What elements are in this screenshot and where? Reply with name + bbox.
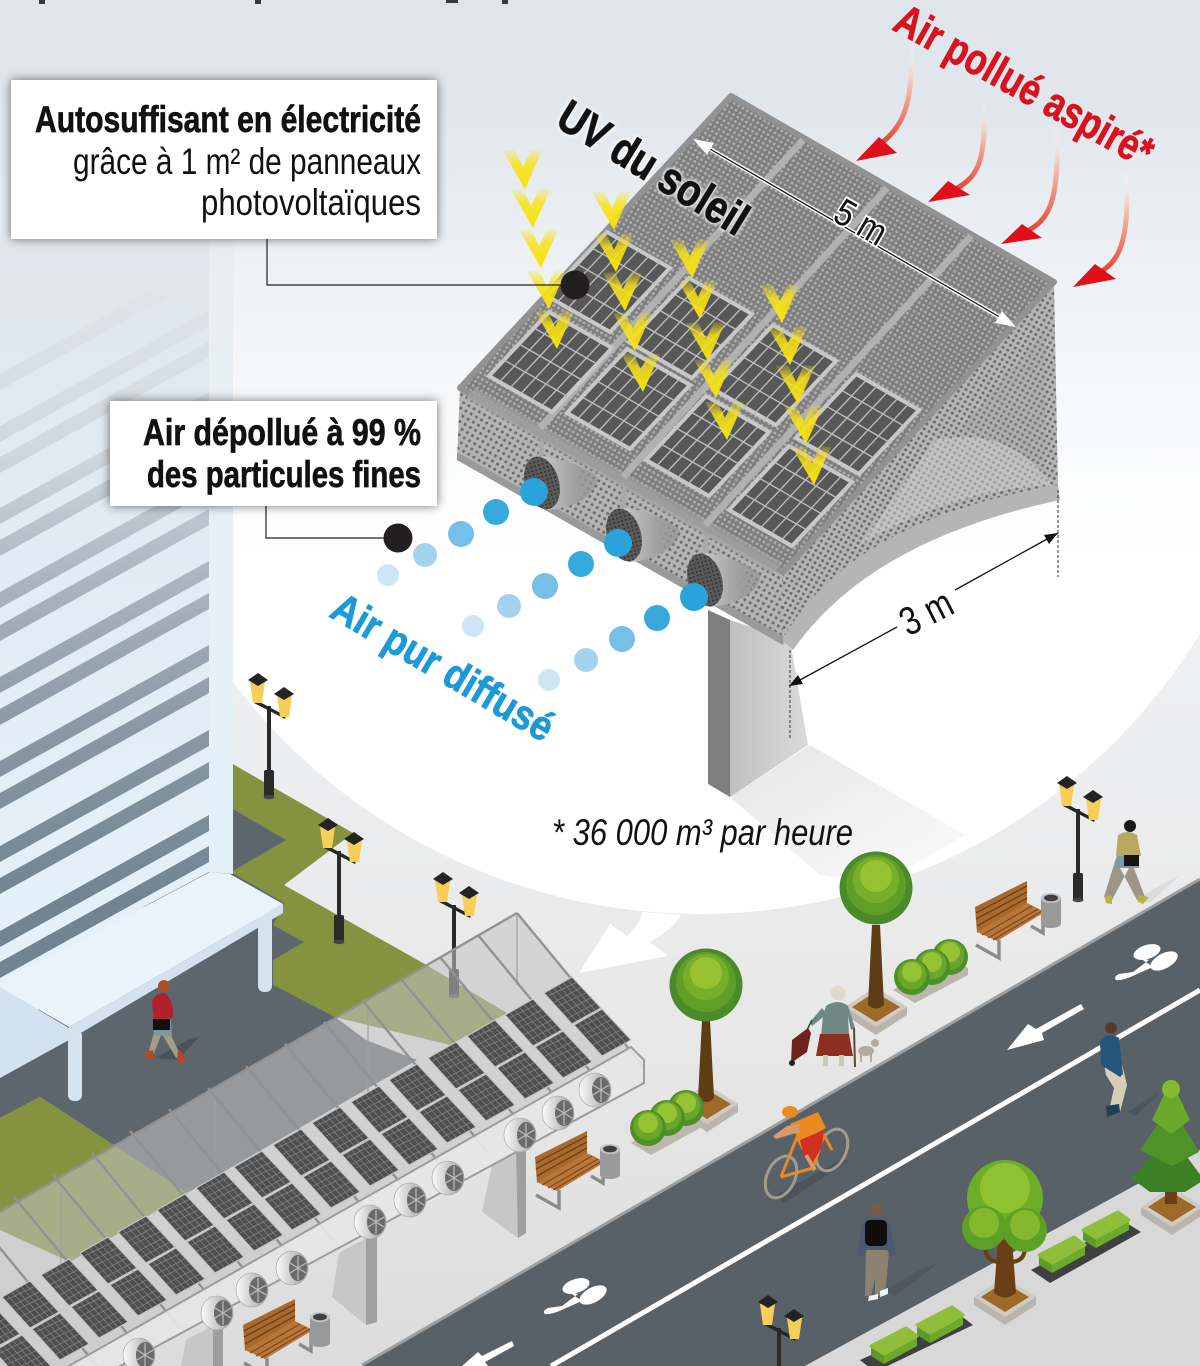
arch rim: [782, 485, 1060, 650]
top clipped text fragments: [39, 0, 508, 4]
glass roof bars: [0, 913, 644, 1366]
fans: [123, 1073, 611, 1366]
callout text: Autosuffisant en électricité: [35, 99, 421, 140]
photovoltaic panels: [489, 232, 919, 546]
dimension: 3 m: [789, 490, 1058, 740]
callout text: des particules fines: [147, 454, 421, 495]
clean air dots: [377, 478, 708, 691]
glass roof: [0, 913, 644, 1366]
clustered tree: [962, 1160, 1047, 1325]
connector line: [266, 506, 388, 538]
lower strip: [466, 388, 783, 574]
facade stripes: [0, 258, 209, 978]
elderly woman with suitcase and dog: [789, 986, 879, 1067]
lawn strips: [0, 763, 507, 1262]
callout: electricity: [11, 80, 590, 300]
callout text: Air dépollué à 99 %: [143, 412, 421, 453]
fan housing: [0, 1047, 644, 1366]
benches and bins: [243, 881, 1061, 1366]
callout text: [35, 99, 421, 223]
glass roof vertical posts: [61, 913, 517, 1267]
solar canopy: [0, 913, 644, 1366]
conifer: [1131, 1080, 1200, 1235]
man in blue: [1100, 1022, 1160, 1117]
callout text: grâce à 1 m² de panneaux: [73, 141, 421, 182]
icon: dog: [858, 1039, 879, 1062]
trees and bushes upper row: [630, 852, 968, 1155]
side mesh face: [783, 282, 1058, 645]
marker dot: [560, 270, 590, 300]
solar panels: [0, 977, 631, 1366]
building canopy roof: [0, 872, 283, 1101]
concrete pillars: [181, 1145, 526, 1366]
direction arrow lower: [462, 1341, 514, 1366]
callout box: [110, 401, 437, 506]
man with backpack: [858, 1204, 940, 1301]
dimension: 5 m: [693, 139, 1016, 327]
icon: bike marking upper: [1115, 941, 1181, 980]
white spotlight: [114, 0, 1200, 914]
callout text: [143, 412, 421, 495]
lower sidewalk: [805, 1150, 1200, 1366]
hedges: [860, 1212, 1141, 1366]
air purifier device: [457, 96, 1060, 797]
dimension: 3 m: 3 m: [892, 581, 960, 645]
outlet fans: [518, 452, 761, 611]
pavement: [0, 800, 417, 1193]
front mesh face: [457, 388, 783, 645]
person in red: [144, 980, 200, 1063]
building: [0, 240, 233, 983]
street lamps behind the canopy: [248, 673, 479, 998]
connector line: [267, 239, 565, 285]
callout: clean air: [110, 401, 437, 552]
callout box: [11, 80, 437, 239]
cyclist: [759, 1106, 854, 1203]
polluted air arrows: [856, 45, 1127, 287]
lane line: [551, 990, 1200, 1366]
dimension: 5 m: 5 m: [827, 191, 894, 255]
ground shadow of the device: [730, 745, 965, 885]
street lamps foreground: [758, 776, 1103, 1366]
direction arrow: [1007, 1004, 1084, 1050]
road: [362, 879, 1200, 1366]
UV chevrons: [503, 150, 831, 485]
pillar: [708, 610, 808, 797]
label: Air pur diffusé: Air pur diffusé: [323, 583, 563, 751]
top mesh face: [460, 96, 1054, 572]
woman with shoulder bag: [1104, 820, 1180, 904]
callout text: photovoltaïques: [201, 182, 421, 223]
ribs: [540, 140, 971, 525]
label: UV du soleil: UV du soleil: [549, 90, 758, 245]
white pointer arrow: [579, 912, 681, 973]
icon: bike marking lower: [544, 1275, 610, 1314]
marker dot: [384, 524, 412, 552]
footnote: * 36 000 m³ par heure: [552, 812, 853, 853]
front face separators: [540, 432, 707, 572]
